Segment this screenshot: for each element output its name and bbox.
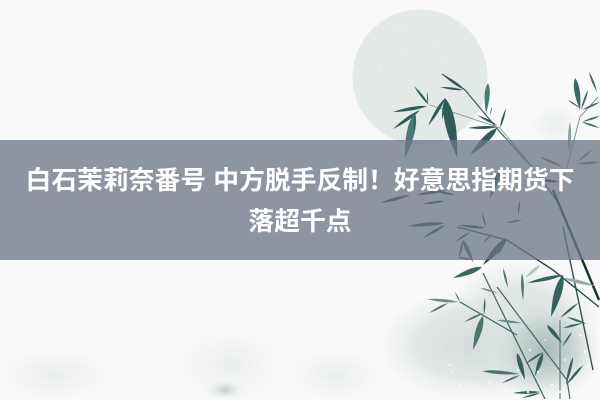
bamboo: right cluster <box>540 72 600 195</box>
title: 白石茉莉奈番号 中方脱手反制！好意思指期货下落超千点 <box>26 167 574 236</box>
banner <box>0 140 600 260</box>
moon <box>352 10 488 144</box>
mist: lower landscape <box>0 105 600 400</box>
snow sparkles <box>379 24 596 393</box>
bamboo: upper branch <box>392 73 560 205</box>
bamboo: lower thicket <box>427 227 596 399</box>
bamboo: banner-level branch <box>380 169 599 307</box>
